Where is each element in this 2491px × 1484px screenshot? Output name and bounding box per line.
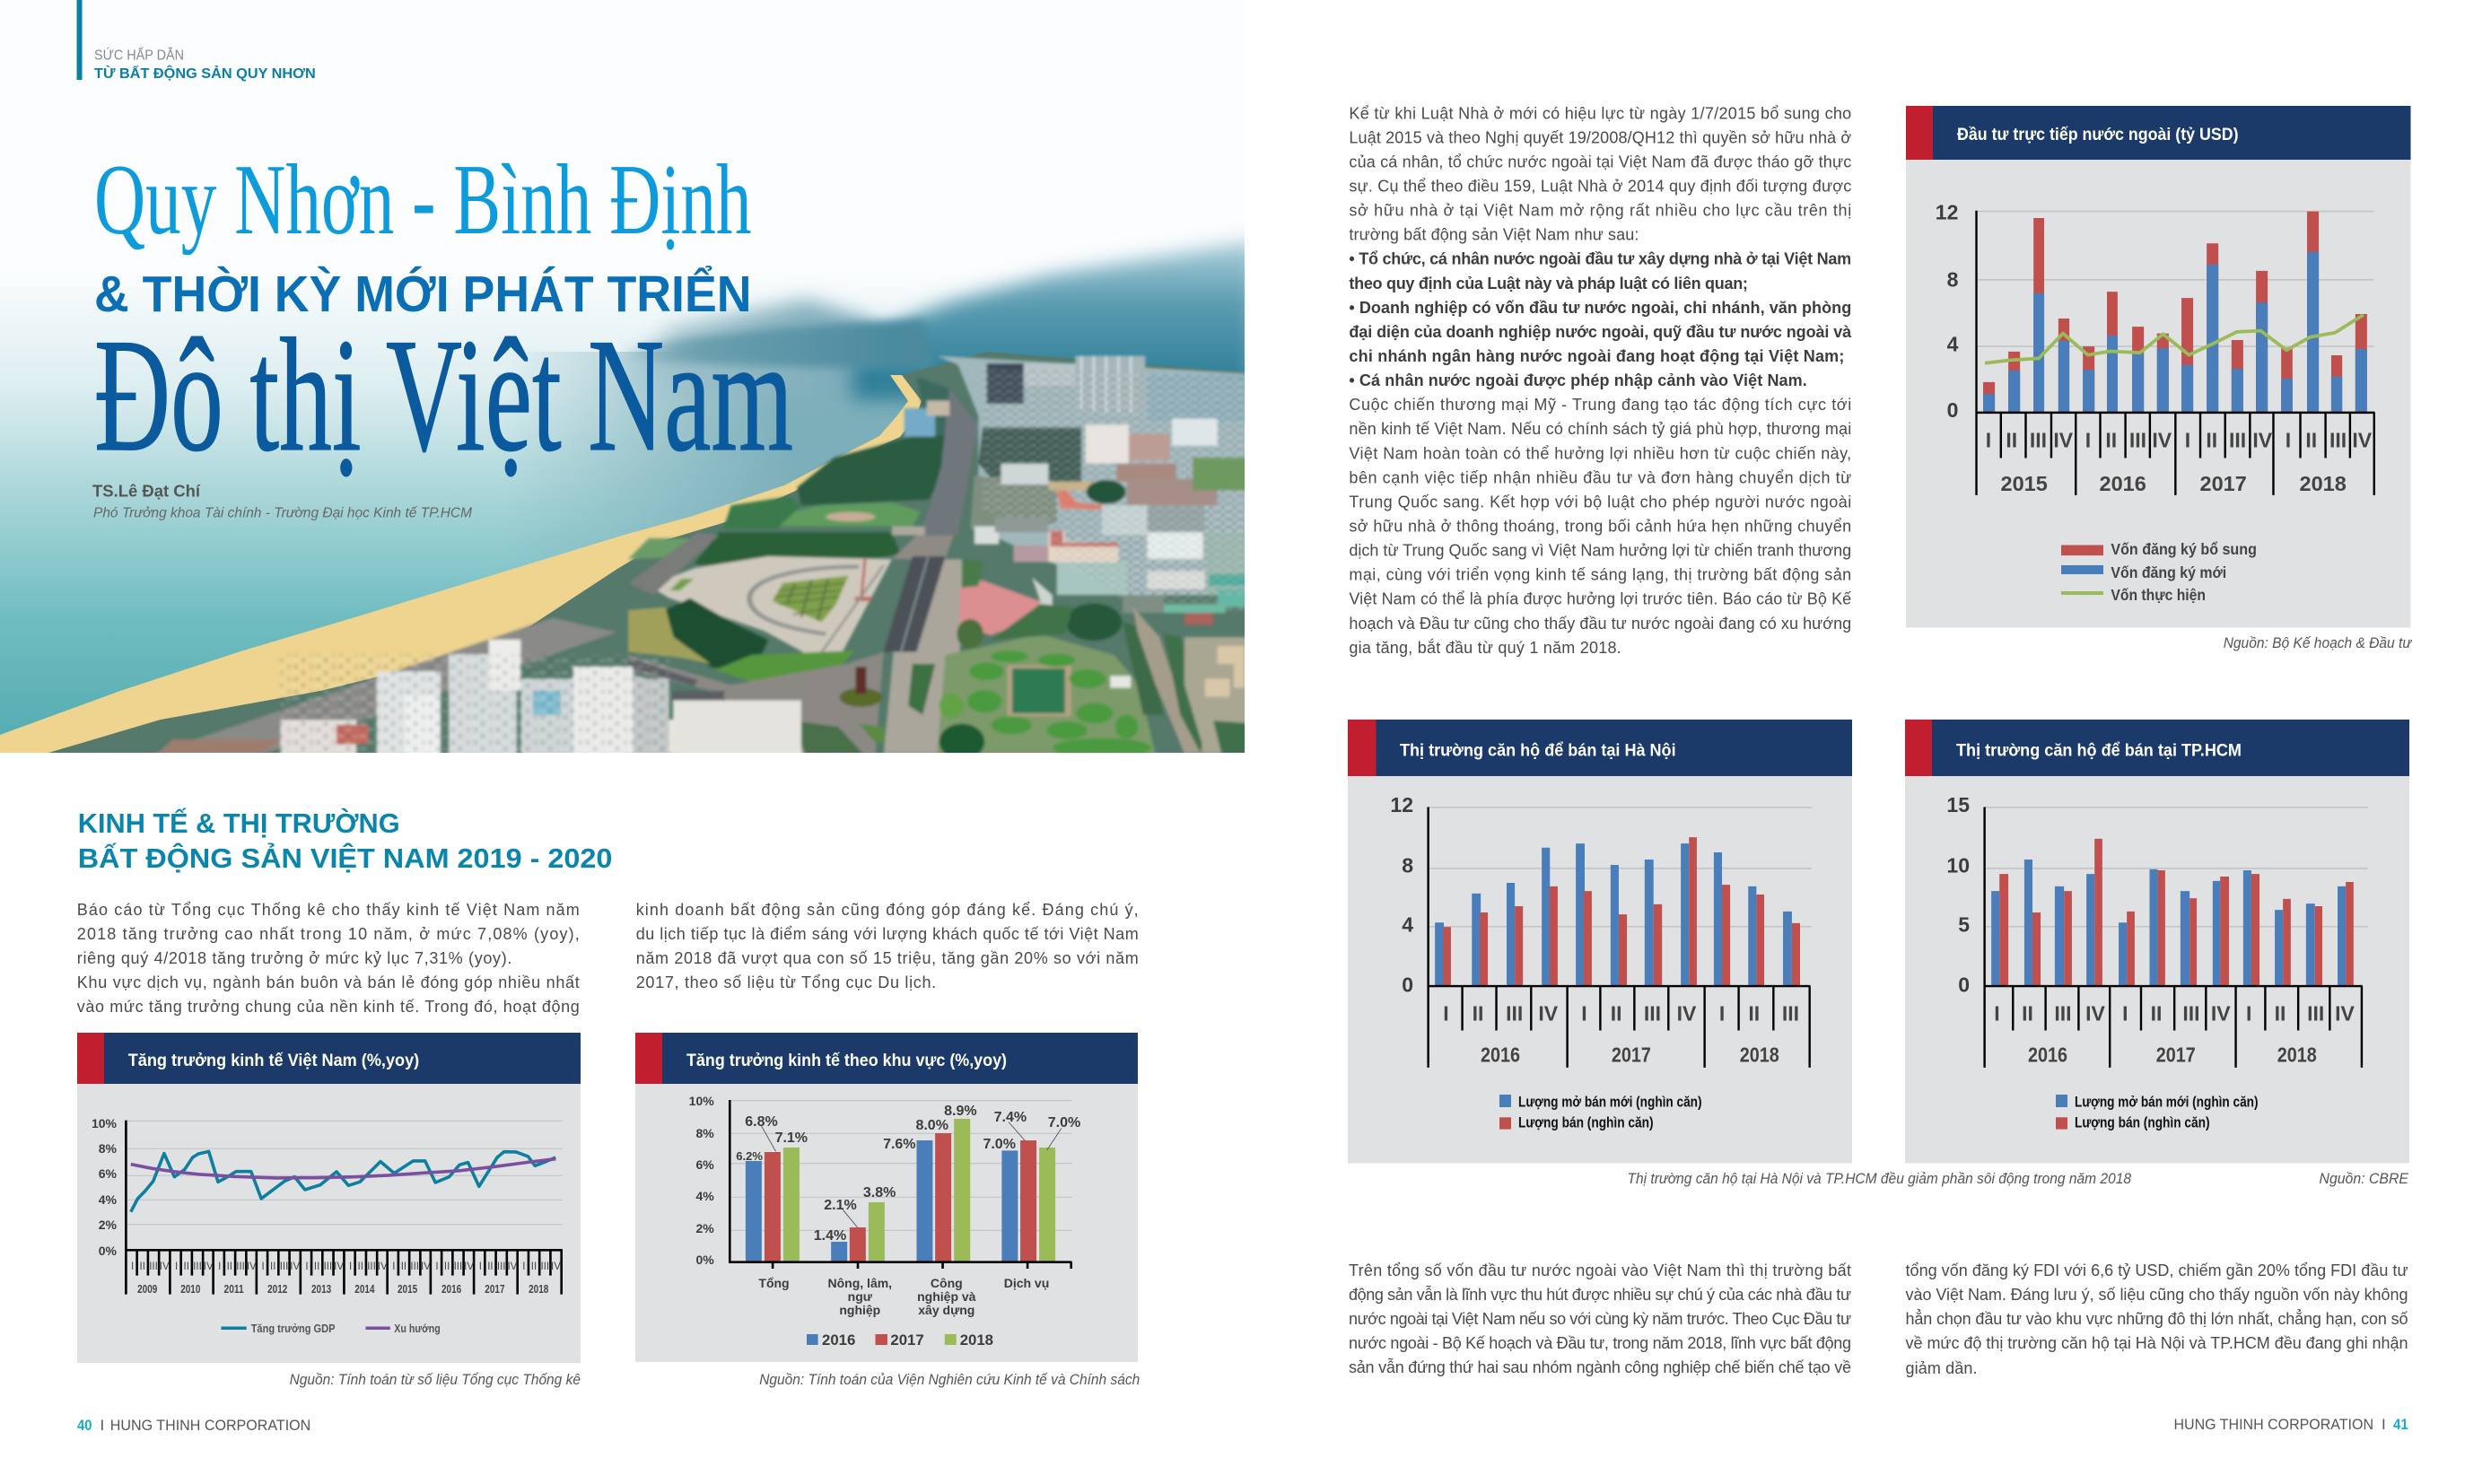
text block: left column 1: Báo cáo từ Tổng cục Thống kê cho thấy kinh tế Việt Nam năm (77, 901, 580, 919)
panel: growth by sector bar chart (635, 1033, 1138, 1362)
section heading: economy and real estate market: BẤT ĐỘNG SẢN VIỆT NAM 2019 - 2020 (78, 842, 612, 874)
year labels: 2010 (180, 1283, 200, 1296)
category labels (758, 1276, 1049, 1317)
quarter labels: I (1719, 1001, 1725, 1025)
text block: bottom right column 1: Trên tổng số vốn đầu tư nước ngoài vào Việt Nam thì thị trường bất (1349, 1261, 1851, 1279)
legend: Tăng trưởng GDP (251, 1323, 336, 1335)
quarter labels: IV (334, 1261, 344, 1272)
year labels: 2018 (1740, 1043, 1779, 1066)
text block: left column 2: 2017, theo số liệu từ Tổng cục Du lịch. (636, 973, 936, 991)
year labels: 2018 (2277, 1043, 2317, 1066)
quarter labels: III (2182, 1001, 2200, 1025)
text block: right page main article: Việt Nam có thể là phía được hưởng lợi trước tiên. Báo cáo từ Bộ Kế (1349, 590, 1851, 608)
data labels: 8.0% (915, 1118, 948, 1133)
quarter labels: I (261, 1261, 265, 1272)
quarter labels: II (2275, 1001, 2286, 1025)
legend: Lượng mở bán mới (nghìn căn) (1518, 1094, 1701, 1111)
photo: aerial view of Quy Nhon coast (0, 228, 1245, 753)
author block: Phó Trưởng khoa Tài chính - Trường Đại học Kinh tế TP.HCM (93, 505, 473, 520)
quarter labels: IV (507, 1261, 518, 1272)
category labels: Nông, lâm, (828, 1276, 892, 1290)
category labels: nghiệp (839, 1303, 880, 1317)
text block: right page main article: gia tăng, bắt đầu từ quý 1 năm 2018. (1349, 638, 1621, 657)
quarter labels: IV (1538, 1001, 1559, 1025)
bar chart: growth by sector: 2% (695, 1221, 714, 1235)
text block: bottom right column 2: tổng vốn đăng ký FDI với 6,6 tỷ USD, chiếm gần 20% tổng FDI đầu tư (1906, 1261, 2408, 1279)
year labels: 2015 (398, 1283, 417, 1296)
legend (1499, 1094, 1701, 1130)
text block: right page main article: sở hữu nhà ở thông thoáng, trong bối cảnh hứa hẹn những chuyển (1349, 517, 1851, 535)
quarter labels: II (2206, 428, 2217, 451)
year labels (1481, 1043, 1779, 1066)
quarter labels: II (401, 1261, 406, 1272)
line chart: GDP growth and trend: 4% (99, 1192, 118, 1207)
panel header: Đầu tư trực tiếp nước ngoài (tỷ USD) (1957, 125, 2238, 144)
panel header: Thị trường căn hộ để bán tại Hà Nội (1400, 741, 1676, 761)
section marker: bar and kicker: SỨC HẤP DẪN (94, 48, 184, 64)
quarter labels: I (218, 1261, 221, 1272)
author block (92, 483, 473, 520)
text block: right page main article: của cá nhân, tổ chức nước ngoài tại Việt Nam đã được tháo gỡ thực (1349, 153, 1851, 170)
legend: Lượng bán (nghìn căn) (2075, 1114, 2210, 1130)
bar chart: growth by sector: 4% (695, 1189, 714, 1203)
year labels (2028, 1043, 2317, 1066)
quarter labels: IV (290, 1261, 300, 1272)
year labels: 2016 (441, 1283, 461, 1296)
text block: bottom right column 2 (1906, 1261, 2408, 1377)
quarter labels: II (314, 1261, 319, 1272)
text block: right page main article: nền kinh tế Việt Nam. Nếu có chính sách tỷ giá phù hợp, thương mại (1349, 420, 1851, 438)
quarter labels: I (1986, 428, 1991, 451)
year labels: 2015 (2001, 472, 2048, 495)
text block: bottom right column 1: nước ngoài - Bộ Kế hoạch và Đầu tư, trong năm 2018, lĩnh vực bất động (1349, 1334, 1851, 1352)
text block: right page main article: sự. Cụ thể theo điều 159, Luật Nhà ở 2014 quy định đối tượng được (1349, 178, 1851, 196)
data labels: 1.4% (814, 1228, 846, 1244)
text block: right page main article: bên cạnh việc tiếp nhận nhiều đầu tư và đơn hàng chuyển dịch từ (1349, 468, 1851, 486)
source note: Nguồn: Tính toán của Viện Nghiên cứu Kinh tế và Chính sách (759, 1372, 1140, 1388)
text block: right page main article: chi nhánh ngân hàng nước ngoài đang hoạt động tại Việt Nam; (1349, 347, 1844, 365)
panel: HCMC apartments chart (1905, 720, 2409, 1163)
category labels: Tổng (758, 1276, 790, 1290)
quarter labels: IV (464, 1261, 474, 1272)
panel: foreign direct investment chart (1906, 106, 2410, 628)
category labels: nghiệp và (917, 1289, 976, 1304)
data labels: 2.1% (824, 1198, 857, 1213)
bar chart: HCMC: 5 (1958, 913, 1970, 937)
quarter labels: II (140, 1261, 145, 1272)
quarter labels: III (2307, 1001, 2324, 1025)
bar chart: Hanoi: 0 (1402, 973, 1413, 996)
quarter labels: III (497, 1261, 505, 1272)
panel header (1906, 106, 2410, 160)
quarter labels: IV (421, 1261, 431, 1272)
quarter labels: IV (2211, 1001, 2231, 1025)
quarter labels: II (184, 1261, 189, 1272)
quarter labels: II (487, 1261, 494, 1272)
text block: bottom right column 1: động sản vẫn là lĩnh vực thu hút được nhiều sự chú ý của các nhà đầu tư (1349, 1285, 1851, 1304)
year labels: 2013 (311, 1283, 331, 1296)
line chart: GDP growth and trend: 2% (99, 1218, 118, 1232)
panel header: Tăng trưởng kinh tế theo khu vực (%,yoy) (686, 1051, 1007, 1070)
page footer left: HUNG THINH CORPORATION (110, 1417, 310, 1434)
legend (2061, 540, 2257, 604)
quarter labels: IV (2352, 428, 2373, 451)
title: and new development period: & THỜI KỲ MỚI PHÁT TRIỂN (94, 265, 752, 323)
text block: right page main article: sở hữu nhà ở tại Việt Nam mở rộng rất nhiều cho lực cầu trên thị (1349, 202, 1851, 220)
source note: Nguồn: Tính toán từ số liệu Tổng cục Thống kê (290, 1372, 581, 1388)
data labels: 6.2% (736, 1149, 763, 1163)
bar chart: growth by sector: 8% (695, 1126, 714, 1140)
data labels: 3.8% (863, 1185, 896, 1200)
quarter labels: III (541, 1261, 549, 1272)
text block: right page main article: trường bất động sản Việt Nam như sau: (1349, 226, 1639, 244)
line chart: GDP growth and trend: 6% (99, 1166, 118, 1181)
quarter labels: III (367, 1261, 376, 1272)
quarter labels: III (2129, 428, 2146, 451)
text block: right page main article: mại, cùng với triển vọng kinh tế sáng lạng, thị trường bất động sản (1349, 566, 1851, 584)
quarter labels: I (1443, 1001, 1449, 1025)
text block: right page main article (1349, 104, 1852, 657)
text block: right page main article: • Tổ chức, cá nhân nước ngoài đầu tư xây dựng nhà ở tại Việt Nam (1349, 250, 1851, 268)
quarter labels: IV (247, 1261, 257, 1272)
quarter labels: II (270, 1261, 275, 1272)
page footer left: I (101, 1417, 104, 1434)
year labels: 2017 (2156, 1043, 2196, 1066)
panel header (77, 1033, 581, 1084)
legend (807, 1331, 993, 1349)
text block: bottom right column 2: hẳn chọn đầu tư vào khu vực những đô thị lớn nhất, chẳng hạn, con số (1906, 1309, 2408, 1328)
quarter labels: III (280, 1261, 288, 1272)
year labels: 2017 (1612, 1043, 1651, 1066)
quarter labels: III (193, 1261, 202, 1272)
section heading: economy and real estate market: KINH TẾ & THỊ TRƯỜNG (78, 807, 400, 839)
text block: left column 1: Khu vực dịch vụ, ngành bán buôn và bán lẻ đóng góp nhiều nhất (77, 973, 580, 991)
text block: left column 2: năm 2018 đã vượt qua con số 15 triệu, tăng gần 20% so với năm (636, 949, 1139, 967)
text block: right page main article: Luật 2015 và theo Nghị quyết 19/2008/QH12 thì quyền sở hữu nhà ở (1349, 128, 1851, 146)
page footer right: 41 (2393, 1416, 2408, 1433)
text block: right page main article: Trung Quốc sang. Kết hợp với bộ luật cho phép người nước ngoài (1349, 493, 1851, 511)
quarter labels: II (1748, 1001, 1760, 1025)
quarter labels: II (227, 1261, 232, 1272)
data labels: 7.0% (983, 1137, 1016, 1152)
quarter labels: I (2286, 428, 2291, 451)
quarter labels: III (2229, 428, 2246, 451)
quarter labels: I (435, 1261, 439, 1272)
legend: 2017 (890, 1331, 924, 1349)
quarter labels: I (2085, 428, 2091, 451)
quarter labels: I (2246, 1001, 2251, 1025)
stacked bar and line chart: FDI: 12 (1936, 200, 1958, 223)
legend: Vốn đăng ký mới (2111, 563, 2226, 581)
quarter labels (1986, 428, 2373, 451)
panel: GDP growth line chart (77, 1033, 581, 1363)
data labels: 7.0% (1048, 1115, 1080, 1130)
source note: Nguồn: Bộ Kế hoạch & Đầu tư (2224, 635, 2413, 651)
quarter labels: III (2030, 428, 2047, 451)
legend: Xu hướng (394, 1323, 441, 1335)
text block: right page main article: Kể từ khi Luật Nhà ở mới có hiệu lực từ ngày 1/7/2015 bổ sung cho (1349, 104, 1851, 122)
stacked bar and line chart: FDI: 8 (1947, 267, 1959, 291)
bar chart: Hanoi: 4 (1402, 913, 1413, 937)
quarter labels: IV (2252, 428, 2273, 451)
quarter labels: II (2305, 428, 2317, 451)
page footer right: I (2382, 1416, 2386, 1433)
source note: Nguồn: CBRE (2319, 1171, 2409, 1187)
quarter labels: I (131, 1261, 134, 1272)
year labels: 2016 (1481, 1043, 1520, 1066)
quarter labels: I (2185, 428, 2190, 451)
quarter labels (131, 1261, 561, 1272)
quarter labels: III (454, 1261, 462, 1272)
year labels: 2018 (2300, 472, 2347, 495)
text block: bottom right column 1: nước ngoài tại Việt Nam nếu so với cùng kỳ năm trước. Theo Cục Đầu tư (1349, 1310, 1851, 1328)
bar chart: Hanoi (1390, 793, 1812, 1068)
bar chart: HCMC: 0 (1958, 973, 1970, 996)
line chart: GDP growth and trend: 10% (92, 1116, 118, 1130)
year labels: 2018 (529, 1283, 548, 1296)
quarter labels: II (1473, 1001, 1483, 1025)
quarter labels: III (236, 1261, 245, 1272)
page footer right: HUNG THINH CORPORATION (2173, 1416, 2373, 1433)
panel header: Tăng trưởng kinh tế Việt Nam (%,yoy) (128, 1051, 419, 1070)
quarter labels: I (1581, 1001, 1587, 1025)
year labels: 2017 (2200, 472, 2247, 495)
line chart: GDP growth and trend (92, 1116, 563, 1296)
quarter labels: II (2006, 428, 2017, 451)
text block: right page main article: Cuộc chiến thương mại Mỹ - Trung đang tạo tác động tích cực tới (1349, 396, 1851, 414)
panel header (1905, 720, 2409, 776)
quarter labels: II (2105, 428, 2117, 451)
text block: right page main article: Việt Nam hoàn toàn có thể hưởng lợi nhiều hơn từ cuộc chiến này, (1349, 444, 1851, 462)
text block: bottom right column 2: vào Việt Nam. Đáng lưu ý, số liệu cũng cho thấy nguồn vốn này không (1906, 1286, 2408, 1304)
page footer left: 40 (77, 1417, 92, 1434)
bar chart: growth by sector: 6% (695, 1157, 714, 1172)
quarter labels (1994, 1001, 2356, 1025)
bar chart: HCMC: 10 (1946, 853, 1970, 877)
quarter labels: III (1506, 1001, 1523, 1025)
quarter labels: IV (2335, 1001, 2356, 1025)
quarter labels: I (2122, 1001, 2128, 1025)
panel header (1348, 720, 1852, 776)
bar chart: growth by sector (689, 1094, 1080, 1317)
quarter labels: I (349, 1261, 352, 1272)
text block: right page main article: hoạch và Đầu tư cũng cho thấy đầu tư nước ngoài đang có xu hướng (1349, 615, 1851, 633)
title: Quy Nhon - Binh Dinh: Quy Nhơn - Bình Định (94, 144, 752, 256)
category labels: Dịch vụ (1004, 1276, 1049, 1290)
text block: right page main article: theo quy định của Luật này và pháp luật có liên quan; (1349, 275, 1748, 292)
stacked bar and line chart: FDI: 4 (1947, 333, 1959, 356)
text block: left column 1: 2018 tăng trưởng cao nhất trong 10 năm, ở mức 7,08% (yoy), (77, 925, 580, 943)
text block: bottom right column 1: sản vẫn đứng thứ hai sau nhóm ngành công nghiệp chế biến chế tạo về (1349, 1357, 1851, 1376)
legend: 2016 (822, 1331, 855, 1349)
legend (221, 1323, 441, 1335)
quarter labels: IV (2085, 1001, 2106, 1025)
text block: left column 1: riêng quý 4/2018 tăng trưởng ở mức kỷ lục 7,31% (yoy). (77, 949, 511, 967)
bar chart: Hanoi: 12 (1390, 793, 1413, 816)
year labels (2001, 472, 2347, 495)
quarter labels: I (305, 1261, 309, 1272)
quarter labels: III (324, 1261, 332, 1272)
text block: right page main article: đại diện của doanh nghiệp nước ngoài, quỹ đầu tư nước ngoài và (1349, 323, 1852, 341)
quarter labels: III (2329, 428, 2347, 451)
quarter labels: IV (160, 1261, 170, 1272)
panel header: Thị trường căn hộ để bán tại TP.HCM (1956, 741, 2242, 761)
line chart: GDP growth and trend: 8% (99, 1141, 118, 1156)
quarter labels: II (358, 1261, 363, 1272)
section marker: bar and kicker (77, 0, 316, 82)
text block: bottom right column 1 (1349, 1261, 1851, 1376)
bar chart: HCMC: 15 (1946, 793, 1970, 816)
quarter labels: IV (1677, 1001, 1697, 1025)
year labels: 2011 (224, 1283, 244, 1296)
bar chart: growth by sector: 10% (689, 1094, 714, 1108)
legend (2056, 1094, 2258, 1130)
legend: 2018 (960, 1331, 993, 1349)
data labels: 7.1% (775, 1130, 808, 1146)
category labels: Công (931, 1276, 963, 1290)
quarter labels (1443, 1001, 1799, 1025)
legend: Lượng mở bán mới (nghìn căn) (2075, 1094, 2258, 1111)
quarter labels: II (531, 1261, 537, 1272)
quarter labels: III (1644, 1001, 1661, 1025)
title: Vietnam urban: Đô thị Việt Nam (94, 306, 793, 485)
data labels: 7.4% (994, 1110, 1027, 1125)
panel: Hanoi apartments chart (1348, 720, 1852, 1163)
year labels: 2009 (137, 1283, 157, 1296)
text block: left column 1: vào mức tăng trưởng chung của nền kinh tế. Trong đó, hoạt động (77, 998, 580, 1016)
text block: left column 2: du lịch tiếp tục là điểm sáng với lượng khách quốc tế tới Việt Nam (636, 925, 1139, 943)
panel header (635, 1033, 1138, 1084)
quarter labels: I (175, 1261, 178, 1272)
legend: Vốn thực hiện (2111, 586, 2206, 604)
text block: right page main article: dịch từ Trung Quốc sang vì Việt Nam hưởng lợi từ chiến tranh thương (1349, 542, 1851, 560)
text block: left column 2 (636, 901, 1139, 991)
quarter labels: I (479, 1261, 482, 1272)
text block: bottom right column 2: về mức độ thị trường căn hộ tại Hà Nội và TP.HCM đều đang ghi nhận (1906, 1334, 2408, 1352)
legend: Lượng bán (nghìn căn) (1518, 1114, 1654, 1130)
category labels: xây dựng (918, 1303, 975, 1317)
year labels: 2016 (2028, 1043, 2067, 1066)
text block: bottom right column 2: giảm dần. (1906, 1359, 1978, 1377)
author block: TS.Lê Đạt Chí (92, 483, 201, 501)
text block: right page main article: • Cá nhân nước ngoài được phép nhập cảnh vào Việt Nam. (1349, 371, 1807, 389)
quarter labels: III (2054, 1001, 2072, 1025)
line chart: GDP growth and trend: 0% (99, 1244, 118, 1258)
quarter labels: IV (204, 1261, 214, 1272)
year labels: 2012 (267, 1283, 287, 1296)
category labels: ngư (848, 1289, 873, 1304)
text block: left column 2: kinh doanh bất động sản cũng đóng góp đáng kể. Đáng chú ý, (636, 901, 1139, 919)
stacked bar and line chart: FDI: 0 (1947, 398, 1958, 422)
legend: Vốn đăng ký bổ sung (2111, 540, 2257, 558)
quarter labels: III (149, 1261, 158, 1272)
data labels: 6.8% (745, 1114, 778, 1130)
quarter labels: IV (551, 1261, 561, 1272)
text block: right page main article: • Doanh nghiệp có vốn đầu tư nước ngoài, chi nhánh, văn phòng (1349, 299, 1851, 317)
bar chart: Hanoi: 8 (1402, 853, 1413, 877)
section heading: economy and real estate market (78, 807, 612, 874)
quarter labels: IV (378, 1261, 388, 1272)
quarter labels: I (522, 1261, 526, 1272)
year labels (137, 1283, 548, 1296)
quarter labels: III (1782, 1001, 1799, 1025)
data labels (736, 1104, 1080, 1244)
quarter labels: III (410, 1261, 419, 1272)
section marker: bar and kicker: TỪ BẤT ĐỘNG SẢN QUY NHƠN (94, 65, 316, 82)
quarter labels: I (392, 1261, 395, 1272)
year labels: 2016 (2100, 472, 2146, 495)
quarter labels: IV (2053, 428, 2074, 451)
year labels: 2017 (485, 1283, 505, 1296)
data labels: 8.9% (944, 1104, 977, 1119)
quarter labels: II (2151, 1001, 2162, 1025)
quarter labels: II (1611, 1001, 1622, 1025)
year labels: 2014 (354, 1283, 375, 1296)
bar chart: growth by sector: 0% (695, 1253, 714, 1267)
quarter labels: II (444, 1261, 450, 1272)
stacked bar and line chart: FDI (1936, 200, 2375, 495)
quarter labels: II (2022, 1001, 2033, 1025)
text block: left column 1 (77, 901, 580, 1016)
quarter labels: IV (2152, 428, 2172, 451)
bar chart: HCMC (1946, 793, 2368, 1068)
chart caption: Thị trường căn hộ tại Hà Nội và TP.HCM đều giảm phần sôi động trong năm 2018 (1628, 1171, 2132, 1187)
data labels: 7.6% (883, 1137, 916, 1152)
quarter labels: I (1994, 1001, 2000, 1025)
